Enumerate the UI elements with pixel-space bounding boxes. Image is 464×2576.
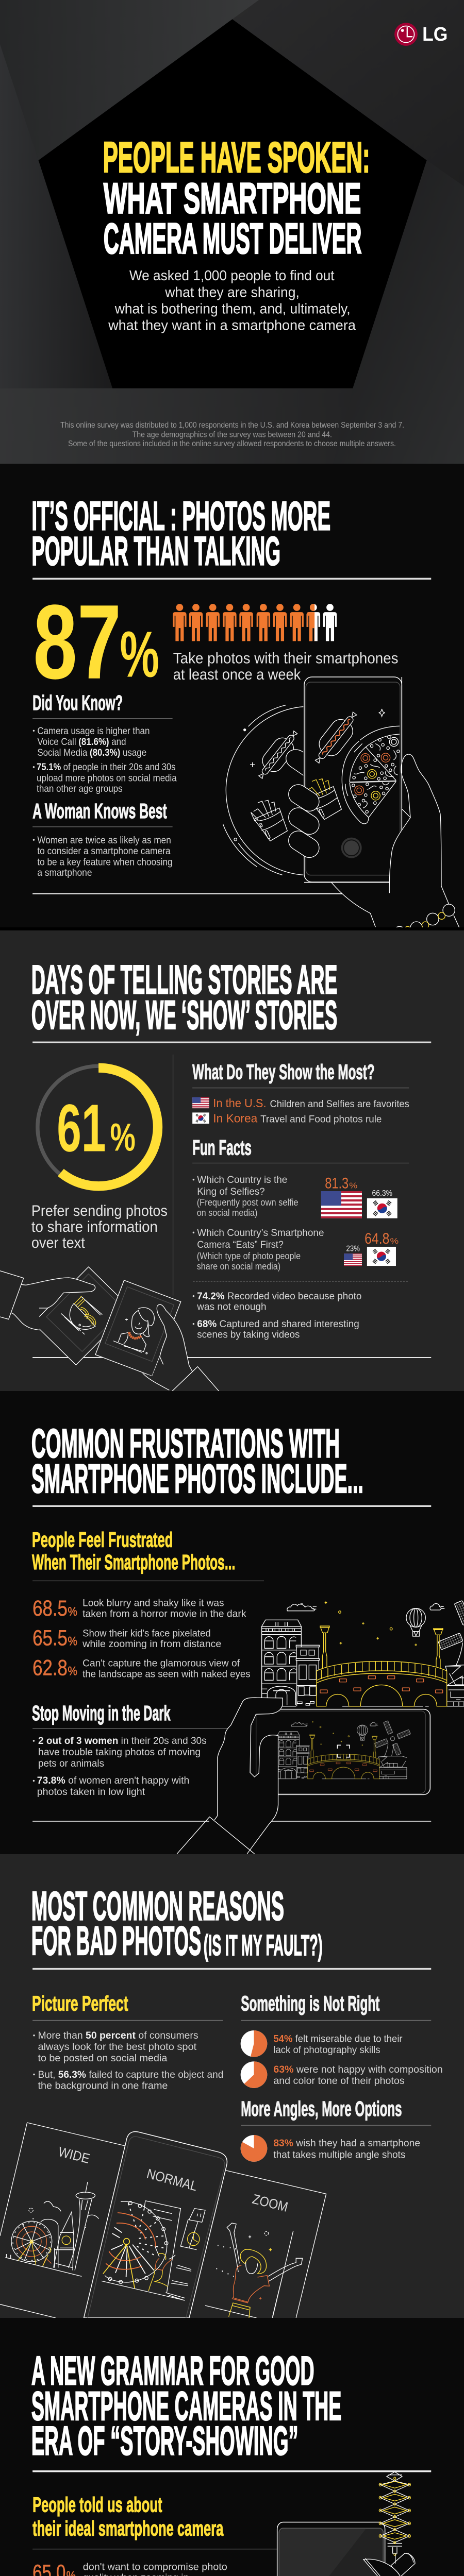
text block: video stats: 74.2% Recorded video because photo bbox=[197, 1291, 362, 1302]
section background bbox=[0, 927, 464, 1391]
stat list: frustrations: Look blurry and shaky like it was bbox=[82, 1597, 224, 1608]
stat caption: Take photos with their smartphones bbox=[173, 650, 399, 667]
heading bbox=[31, 957, 431, 1296]
chart: selfie share US vs Korea: 81.3 bbox=[325, 1175, 349, 1192]
phone bbox=[277, 2522, 385, 2576]
stat list: ideal camera wishes bbox=[32, 2560, 431, 2576]
stat list: frustrations: % bbox=[68, 1605, 77, 1619]
subtitle bbox=[108, 267, 356, 333]
stat list: frustrations: 62.8 bbox=[32, 1656, 68, 1680]
text block: something is not right: and color tone of their photos bbox=[273, 2075, 405, 2087]
text block: what do they show the most: Children and Selfies are favorites bbox=[270, 1098, 409, 1110]
text block: a woman knows best: to consider a smartphone camera bbox=[37, 845, 171, 857]
heading bbox=[31, 1883, 431, 1970]
stat caption: to share information bbox=[31, 1218, 158, 1235]
text block: video stats: scenes by taking videos bbox=[197, 1329, 300, 1341]
pie chart: 63 percent bbox=[241, 2061, 267, 2088]
stat list: frustrations: 65.5 bbox=[32, 1626, 68, 1650]
text block: fun facts: Which Country is the bbox=[197, 1174, 287, 1185]
subheading: people feel frustrated: People Feel Frustrated bbox=[32, 1528, 173, 1551]
survey note: This online survey was distributed to 1,000 respondents in the U.S. and Korea between September 3 and 7. bbox=[60, 421, 404, 430]
title bbox=[103, 133, 370, 262]
survey note: Some of the questions included in the online survey allowed respondents to choose multiple answers. bbox=[68, 439, 396, 448]
text block: picture perfect: the background in one frame bbox=[38, 2080, 168, 2092]
text block: fun facts: Camera “Eats” First? bbox=[197, 1239, 284, 1250]
text block: more angles more options: 83% wish they had a smartphone bbox=[273, 2138, 420, 2149]
chart: food photos US vs Korea: 23% bbox=[346, 1245, 360, 1253]
text block: video stats: was not enough bbox=[196, 1301, 267, 1313]
text block: did you know: Did You Know? bbox=[32, 691, 123, 715]
illustration: hand photographing food with smartphone bbox=[223, 677, 459, 939]
text block: did you know bbox=[32, 691, 177, 794]
donut chart: 61 percent: 61 bbox=[57, 1091, 106, 1166]
illustration: phone showing blurry night photo bbox=[250, 1709, 430, 1794]
text block: stop moving in the dark: 2 out of 3 women in their 20s and 30s bbox=[38, 1735, 207, 1747]
card: wide view bbox=[0, 2123, 125, 2318]
phone: normal view bbox=[84, 2131, 227, 2318]
text block: picture perfect: always look for the best photo spot bbox=[38, 2041, 197, 2053]
subtitle: We asked 1,000 people to find out bbox=[129, 267, 335, 283]
illustration: hand holding phone bbox=[177, 1698, 283, 1854]
donut chart: 61 percent: % bbox=[110, 1115, 136, 1159]
chart: selfie share US vs Korea: 66.3% bbox=[372, 1189, 392, 1198]
subheading: ideal smartphone camera bbox=[32, 2493, 278, 2549]
text block: did you know: Voice Call (81.6%) and bbox=[37, 736, 126, 748]
text block: a woman knows best: A Woman Knows Best bbox=[32, 799, 167, 823]
label: wide normal zoom: ZOOM bbox=[251, 2191, 290, 2215]
stat list: frustrations bbox=[32, 1596, 251, 1680]
stat list: frustrations: % bbox=[68, 1635, 77, 1649]
text block: picture perfect bbox=[32, 1991, 223, 2092]
text block: something is not right: 63% were not happy with composition bbox=[273, 2064, 443, 2075]
text block: fun facts: Fun Facts bbox=[192, 1136, 252, 1159]
text block: video stats: 68% Captured and shared interesting bbox=[197, 1318, 359, 1330]
stat: 87 percent: % bbox=[120, 618, 159, 690]
text block: something is not right bbox=[241, 1991, 443, 2088]
text block: a woman knows best: a smartphone bbox=[37, 867, 92, 878]
text block: fun facts: on social media) bbox=[197, 1207, 257, 1218]
stat list: frustrations: Can't capture the glamorous view of bbox=[82, 1657, 240, 1669]
text block: stop moving in the dark: Stop Moving in the Dark bbox=[32, 1701, 171, 1725]
text block: more angles more options: that takes multiple angle shots bbox=[273, 2149, 406, 2160]
card: zoom view bbox=[205, 2171, 326, 2318]
text block: fun facts: (Which type of photo people bbox=[197, 1250, 301, 1261]
section background bbox=[0, 2318, 464, 2576]
chart: food photos US vs Korea bbox=[344, 1230, 399, 1266]
text block: stop moving in the dark: 73.8% of women aren't happy with bbox=[37, 1775, 189, 1786]
stat caption: at least once a week bbox=[173, 666, 301, 683]
stat caption: over text bbox=[31, 1234, 85, 1251]
label: wide normal zoom: WIDE bbox=[57, 2144, 91, 2166]
stat: 87 percent: 87 bbox=[33, 583, 121, 701]
panel: hero bbox=[0, 0, 464, 464]
chart: food photos US vs Korea: 64.8 bbox=[364, 1230, 389, 1247]
text block: what do they show the most bbox=[192, 1060, 409, 1125]
panel: most common reasons for bad photos bbox=[0, 1854, 464, 2318]
text block: picture perfect: Picture Perfect bbox=[32, 1991, 128, 2015]
text block: did you know: Camera usage is higher than bbox=[37, 725, 150, 737]
stat caption: Prefer sending photos bbox=[31, 1202, 168, 1219]
heading: (IS IT MY FAULT?) bbox=[204, 1929, 323, 1961]
text block: fun facts: Which Country’s Smartphone bbox=[197, 1227, 324, 1239]
text block: something is not right: lack of photography skills bbox=[273, 2044, 380, 2056]
label: wide normal zoom: NORMAL bbox=[145, 2166, 199, 2194]
section background bbox=[0, 1854, 464, 2318]
text block: a woman knows best bbox=[32, 799, 343, 894]
label: wide normal zoom bbox=[57, 2144, 290, 2215]
icon: LG logo: LG bbox=[422, 24, 448, 45]
stat list: ideal camera wishes: don't want to compromise photo bbox=[83, 2561, 227, 2572]
stat list: frustrations: taken from a horror movie in the dark bbox=[82, 1608, 246, 1620]
panel: common frustrations bbox=[31, 1421, 464, 1854]
stat list: frustrations: the landscape as seen with naked eyes bbox=[82, 1669, 251, 1680]
text block: fun facts bbox=[192, 1136, 409, 1272]
pie chart: 54 percent bbox=[241, 2030, 267, 2057]
stat caption bbox=[173, 650, 399, 683]
text block: did you know: Social Media (80.3%) usage bbox=[37, 747, 146, 758]
text block: picture perfect: But, 56.3% failed to capture the object and bbox=[38, 2069, 223, 2080]
illustration: city skyline with bridge and windmill bbox=[262, 1601, 464, 1706]
pie chart: 83 percent bbox=[241, 2135, 267, 2162]
text block: video stats bbox=[32, 1281, 431, 1358]
stat list: frustrations: Show their kid's face pixelated bbox=[82, 1628, 211, 1639]
text block: stop moving in the dark: pets or animals bbox=[38, 1758, 104, 1769]
stat caption bbox=[31, 1202, 168, 1251]
subtitle: what they are sharing, bbox=[164, 284, 300, 300]
illustration: photo studio around smartphone bbox=[276, 2472, 416, 2576]
subheading: people feel frustrated bbox=[32, 1528, 264, 1581]
donut chart: 61 percent bbox=[38, 1066, 159, 1188]
text block: a woman knows best: to be a key feature when choosing bbox=[37, 856, 173, 868]
text block: what do they show the most: In the U.S. bbox=[213, 1096, 267, 1110]
text block: a woman knows best: Women are twice as likely as men bbox=[37, 835, 171, 846]
stat list: frustrations: 68.5 bbox=[32, 1596, 68, 1620]
heading bbox=[31, 494, 431, 580]
text block: fun facts: King of Selfies? bbox=[197, 1186, 265, 1197]
panel: photos more popular than talking bbox=[31, 494, 459, 939]
text block: did you know: 75.1% of people in their 20s and 30s bbox=[37, 761, 176, 773]
survey note bbox=[60, 421, 404, 448]
text block: what do they show the most: In Korea bbox=[213, 1111, 258, 1125]
text block: fun facts: (Frequently post own selfie bbox=[197, 1197, 299, 1208]
subtitle: what they want in a smartphone camera bbox=[108, 317, 356, 333]
chart: selfie share US vs Korea bbox=[321, 1175, 397, 1218]
text block: what do they show the most: Travel and Food photos rule bbox=[260, 1113, 382, 1125]
heading bbox=[31, 2348, 431, 2472]
text block: stop moving in the dark: have trouble taking photos of moving bbox=[38, 1747, 201, 1758]
chart: selfie share US vs Korea: % bbox=[349, 1181, 357, 1190]
subheading: people feel frustrated: When Their Smartphone Photos... bbox=[32, 1550, 235, 1574]
text block: fun facts: share on social media) bbox=[197, 1261, 280, 1272]
illustration: wide normal zoom camera views bbox=[0, 2123, 326, 2318]
icon: LG logo bbox=[394, 23, 448, 46]
illustration: hands holding instant photos bbox=[0, 1267, 219, 1392]
text block: did you know: upload more photos on social media bbox=[37, 772, 177, 784]
heading: FOR BAD PHOTOS bbox=[31, 1918, 201, 1963]
hero background facets bbox=[0, 0, 464, 464]
text block: stop moving in the dark: photos taken in low light bbox=[37, 1786, 145, 1798]
text block: picture perfect: More than 50 percent of consumers bbox=[38, 2030, 198, 2041]
text block: picture perfect: to be posted on social media bbox=[38, 2053, 167, 2064]
subheading: ideal smartphone camera: their ideal smartphone camera bbox=[32, 2516, 224, 2540]
stat list: frustrations: % bbox=[68, 1665, 77, 1679]
chart: food photos US vs Korea: % bbox=[390, 1236, 399, 1246]
text block: did you know: than other age groups bbox=[37, 783, 123, 794]
survey note: The age demographics of the survey was between 20 and 44. bbox=[132, 430, 332, 439]
panel: new grammar for smartphone cameras bbox=[31, 2355, 431, 2576]
pictogram: ten people bbox=[173, 604, 337, 641]
stat list: frustrations: while zooming in from distance bbox=[82, 1638, 221, 1650]
subheading: ideal smartphone camera: People told us about bbox=[32, 2493, 162, 2516]
text block: something is not right: 54% felt miserable due to their bbox=[273, 2033, 403, 2044]
text block: more angles more options bbox=[241, 2097, 431, 2162]
scissor arm and studio light bbox=[363, 2472, 421, 2576]
text block: stop moving in the dark bbox=[32, 1701, 431, 1822]
panel: days of telling stories bbox=[0, 927, 464, 1392]
subtitle: what is bothering them, and, ultimately, bbox=[114, 300, 351, 316]
heading bbox=[31, 1421, 431, 1507]
